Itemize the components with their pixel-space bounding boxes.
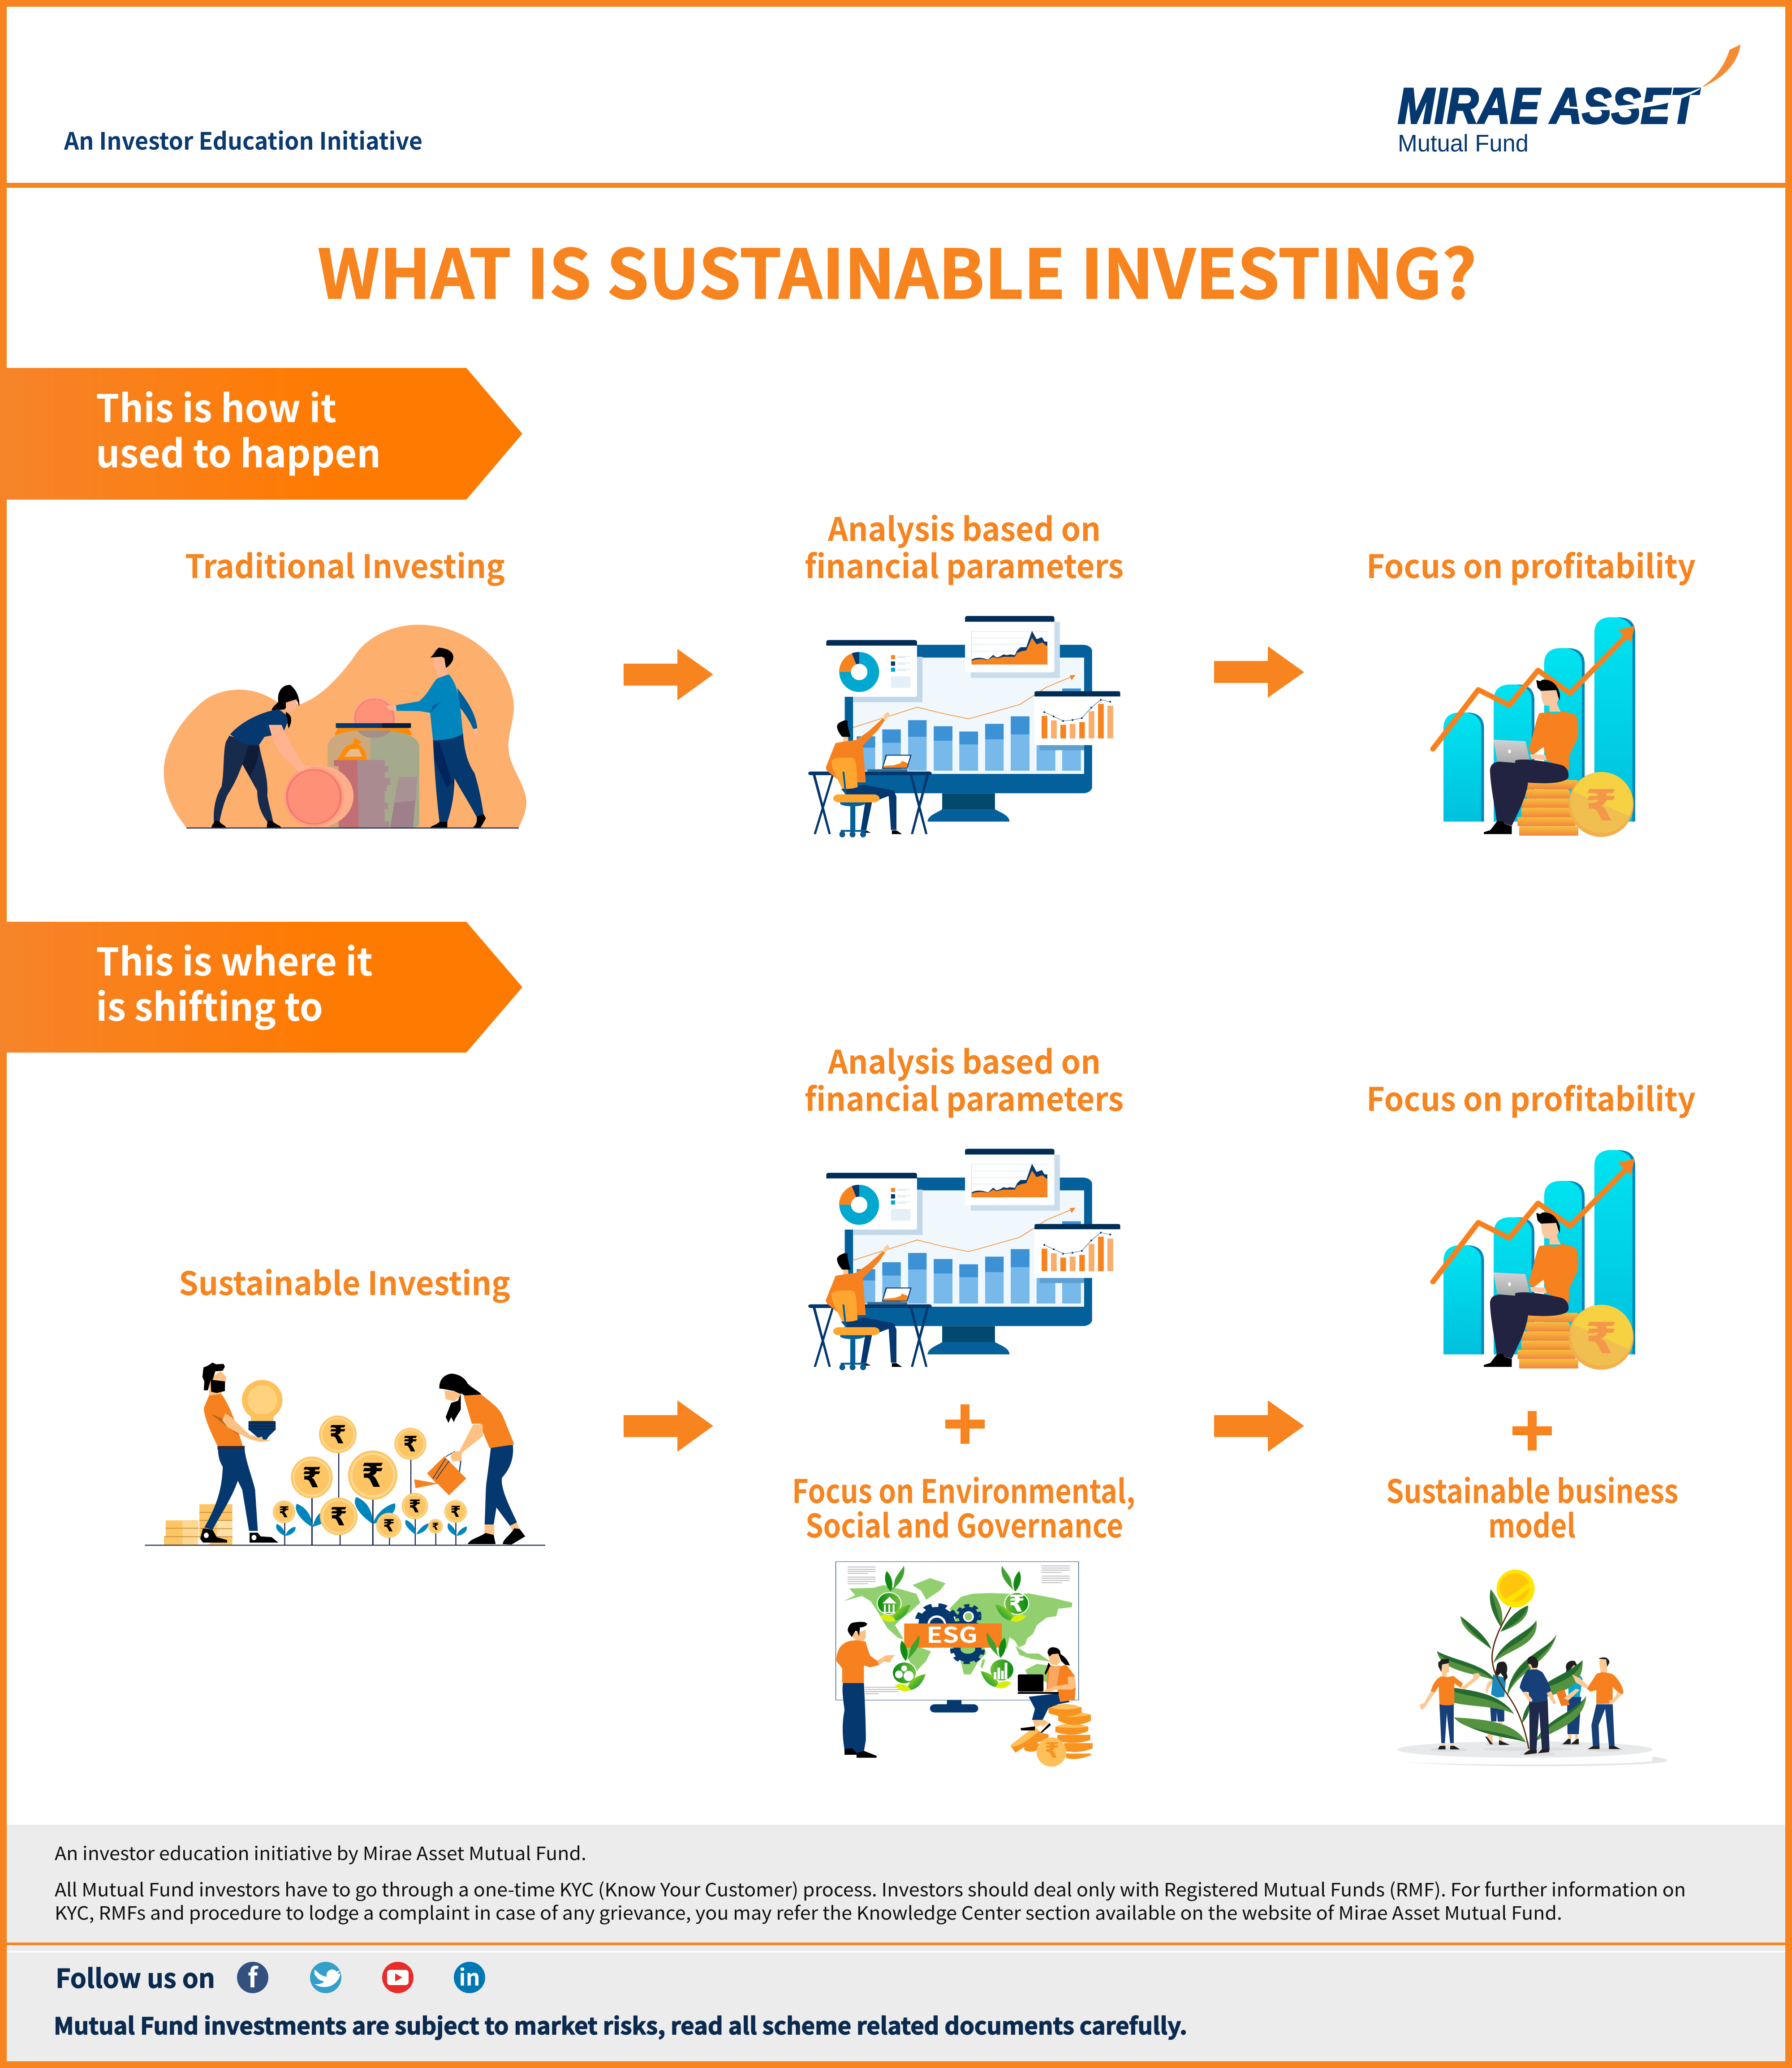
disclaimer text: An investor education initiative by Mirae Asset Mutual Fund. (55, 1839, 586, 1865)
illustration: man with rising bar chart (second) (1433, 1150, 1635, 1370)
banner: how it used to happen (0, 368, 522, 500)
banner: where it is shifting to: This is where it (96, 932, 373, 987)
illustration: analyst with dashboard monitor (808, 616, 1120, 837)
icon: facebook: f (248, 1956, 259, 1995)
heading: focus on profitability (second): Focus on profitability (1366, 1073, 1696, 1120)
disclaimer text: All Mutual Fund investors have to go through a one-time KYC (Know Your Customer) process. Investors should deal only with Registered Mutual Funds (RMF). For further information on (55, 1875, 1686, 1902)
header tagline: An Investor Education Initiative (64, 123, 422, 157)
heading: analysis based on financial parameters: Analysis based on (827, 503, 1101, 550)
heading: focus on environmental, social and governance: Focus on Environmental, (792, 1465, 1135, 1512)
icon: facebook (237, 1956, 268, 1995)
illustration: couple growing rupee plants (145, 1363, 545, 1546)
icon: twitter (310, 1962, 341, 1993)
arrow: traditional investing to analysis (624, 649, 713, 700)
heading: analysis based on financial parameters (second): financial parameters (805, 1073, 1124, 1120)
heading: sustainable business model (1386, 1465, 1678, 1547)
heading: traditional investing: Traditional Investing (185, 540, 505, 587)
illustration: couple saving coins in a jar (164, 625, 526, 829)
heading: focus on environmental, social and governance: Social and Governance (806, 1500, 1123, 1547)
title: WHAT IS SUSTAINABLE INVESTING? (318, 220, 1477, 318)
icon: linkedin (454, 1960, 485, 1993)
illustration: analyst with dashboard monitor (second) (808, 1149, 1120, 1370)
heading: focus on environmental, social and governance (792, 1465, 1135, 1547)
follow us label: Follow us on (56, 1958, 215, 1995)
heading: analysis based on financial parameters (805, 503, 1124, 587)
illustration: ESG world map presentation: ₹ (1009, 1591, 1025, 1618)
illustration: ESG world map presentation: ESG (926, 1618, 978, 1649)
bottom orange frame (0, 2061, 1792, 2068)
illustration: ESG world map presentation (836, 1562, 1093, 1767)
logo: Mirae Asset Mutual Fund: MIRAE ASSET (1398, 78, 1701, 134)
disclaimer text (55, 1839, 1686, 1925)
arrow: sustainable investing to analysis (624, 1400, 713, 1452)
banner: how it used to happen: This is how it (96, 378, 336, 433)
plus sign: analysis plus ESG (945, 1404, 985, 1444)
heading: analysis based on financial parameters: financial parameters (805, 540, 1124, 587)
heading: sustainable business model: Sustainable business (1386, 1465, 1678, 1512)
banner: where it is shifting to (0, 922, 522, 1053)
orange footer divider (0, 1943, 1792, 1945)
banner: how it used to happen: used to happen (96, 423, 381, 479)
plus sign: profitability plus sustainable model (1512, 1411, 1552, 1451)
illustration: ESG world map presentation: ₹ (1045, 1739, 1060, 1763)
risk statement: Mutual Fund investments are subject to market risks, read all scheme related documents carefully. (54, 2008, 1187, 2041)
illustration: man with rising bar chart and coins (1433, 617, 1635, 837)
heading: analysis based on financial parameters (second): Analysis based on (827, 1036, 1101, 1083)
arrow: analysis to outcomes (1214, 1400, 1304, 1452)
illustration: man with rising bar chart and coins: ₹ (1585, 780, 1617, 831)
icon: youtube (382, 1962, 414, 1993)
heading: analysis based on financial parameters (second) (805, 1036, 1124, 1120)
illustration: team around a coin plant (1397, 1570, 1667, 1766)
heading: sustainable investing: Sustainable Investing (179, 1257, 510, 1304)
disclaimer text: KYC, RMFs and procedure to lodge a complaint in case of any grievance, you may refer the Knowledge Center section available on the website of Mirae Asset Mutual Fund. (55, 1898, 1562, 1925)
icon: linkedin: in (459, 1960, 480, 1992)
banner: where it is shifting to: is shifting to (96, 977, 323, 1032)
footer panel: disclaimer (7, 1825, 1785, 1943)
heading: focus on profitability: Focus on profitability (1366, 540, 1696, 587)
arrow: analysis to profitability (1214, 646, 1304, 698)
heading: sustainable business model: model (1488, 1500, 1576, 1547)
logo: Mirae Asset Mutual Fund: Mutual Fund (1398, 130, 1529, 157)
footer panel: follow us and risk statement (7, 1945, 1785, 2061)
logo: Mirae Asset Mutual Fund (1398, 44, 1740, 157)
